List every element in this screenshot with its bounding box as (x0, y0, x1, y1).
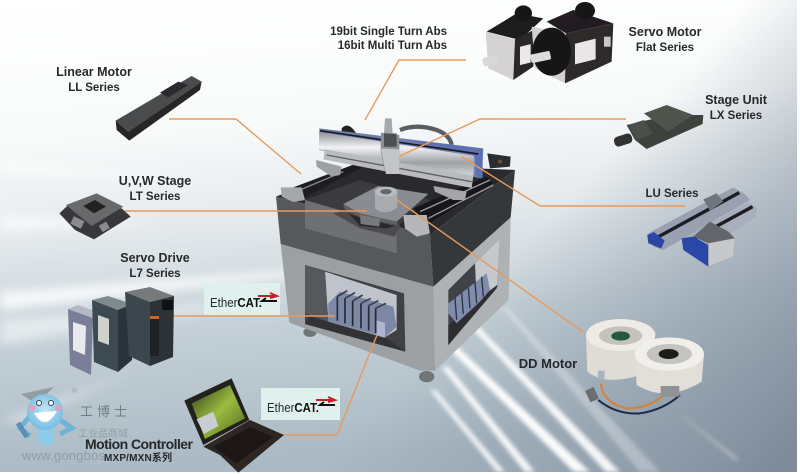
linear motor image (116, 76, 202, 141)
label: Motion Controller: MXP/MXN系列 (104, 451, 172, 464)
label: Servo Motor: Servo Motor (629, 25, 702, 39)
label: Servo Motor (629, 25, 702, 54)
label: U,V,W Stage (119, 174, 191, 203)
logo text (21, 387, 128, 463)
logo text: 工业品商城 (78, 427, 128, 440)
EtherCAT badge: controller (261, 388, 340, 420)
U,V,W stage image (59, 193, 131, 239)
LU series image (647, 187, 757, 267)
label: DD Motor: DD Motor (519, 356, 577, 371)
rotary stage with DD motor (343, 186, 428, 228)
servo drives image (68, 287, 174, 375)
EtherCAT badge: drive (204, 283, 280, 315)
machine feet (303, 262, 499, 382)
label: Servo Motor: Flat Series (636, 42, 694, 54)
lower frame (281, 217, 511, 371)
DD motor image (585, 319, 704, 413)
EtherCAT badge: controller: EtherCAT. (267, 400, 319, 415)
label: encoder bits: 19bit Single Turn Abs (330, 26, 447, 38)
label: Servo Drive: L7 Series (129, 268, 181, 280)
drive units in frame (328, 273, 490, 337)
Z-axis carriage (381, 118, 399, 174)
upper dark block (276, 163, 515, 287)
gantry beam (319, 126, 483, 188)
label: Stage Unit: Stage Unit (705, 93, 768, 107)
laptop image (184, 378, 284, 473)
orange connector lines (125, 60, 685, 435)
logo text: 工 博 士 (80, 404, 127, 419)
label: Linear Motor: LL Series (68, 82, 120, 94)
label: Stage Unit: LX Series (710, 110, 762, 122)
logo text: www.gongbos (21, 448, 106, 463)
label: Linear Motor (56, 65, 132, 94)
EtherCAT badge: drive: EtherCAT. (210, 295, 262, 310)
label: Stage Unit (705, 93, 768, 122)
label: Servo Drive (120, 251, 190, 280)
central machine (276, 118, 515, 382)
mascot logo (18, 387, 72, 445)
stage unit image (613, 105, 703, 149)
label: U,V,W Stage: LT Series (130, 191, 180, 203)
linear guide rails on top (281, 153, 511, 237)
label: Servo Drive: Servo Drive (120, 251, 190, 265)
label: Linear Motor: Linear Motor (56, 65, 132, 79)
label: Motion Controller (85, 436, 194, 464)
label: LU Series: LU Series (645, 188, 699, 200)
logo text: ® (72, 387, 78, 395)
label: U,V,W Stage: U,V,W Stage (119, 174, 191, 188)
label: encoder bits: 16bit Multi Turn Abs (338, 40, 447, 52)
label: Motion Controller: Motion Controller (85, 436, 194, 452)
label: encoder bits (330, 26, 447, 52)
servo motor image (482, 2, 613, 83)
